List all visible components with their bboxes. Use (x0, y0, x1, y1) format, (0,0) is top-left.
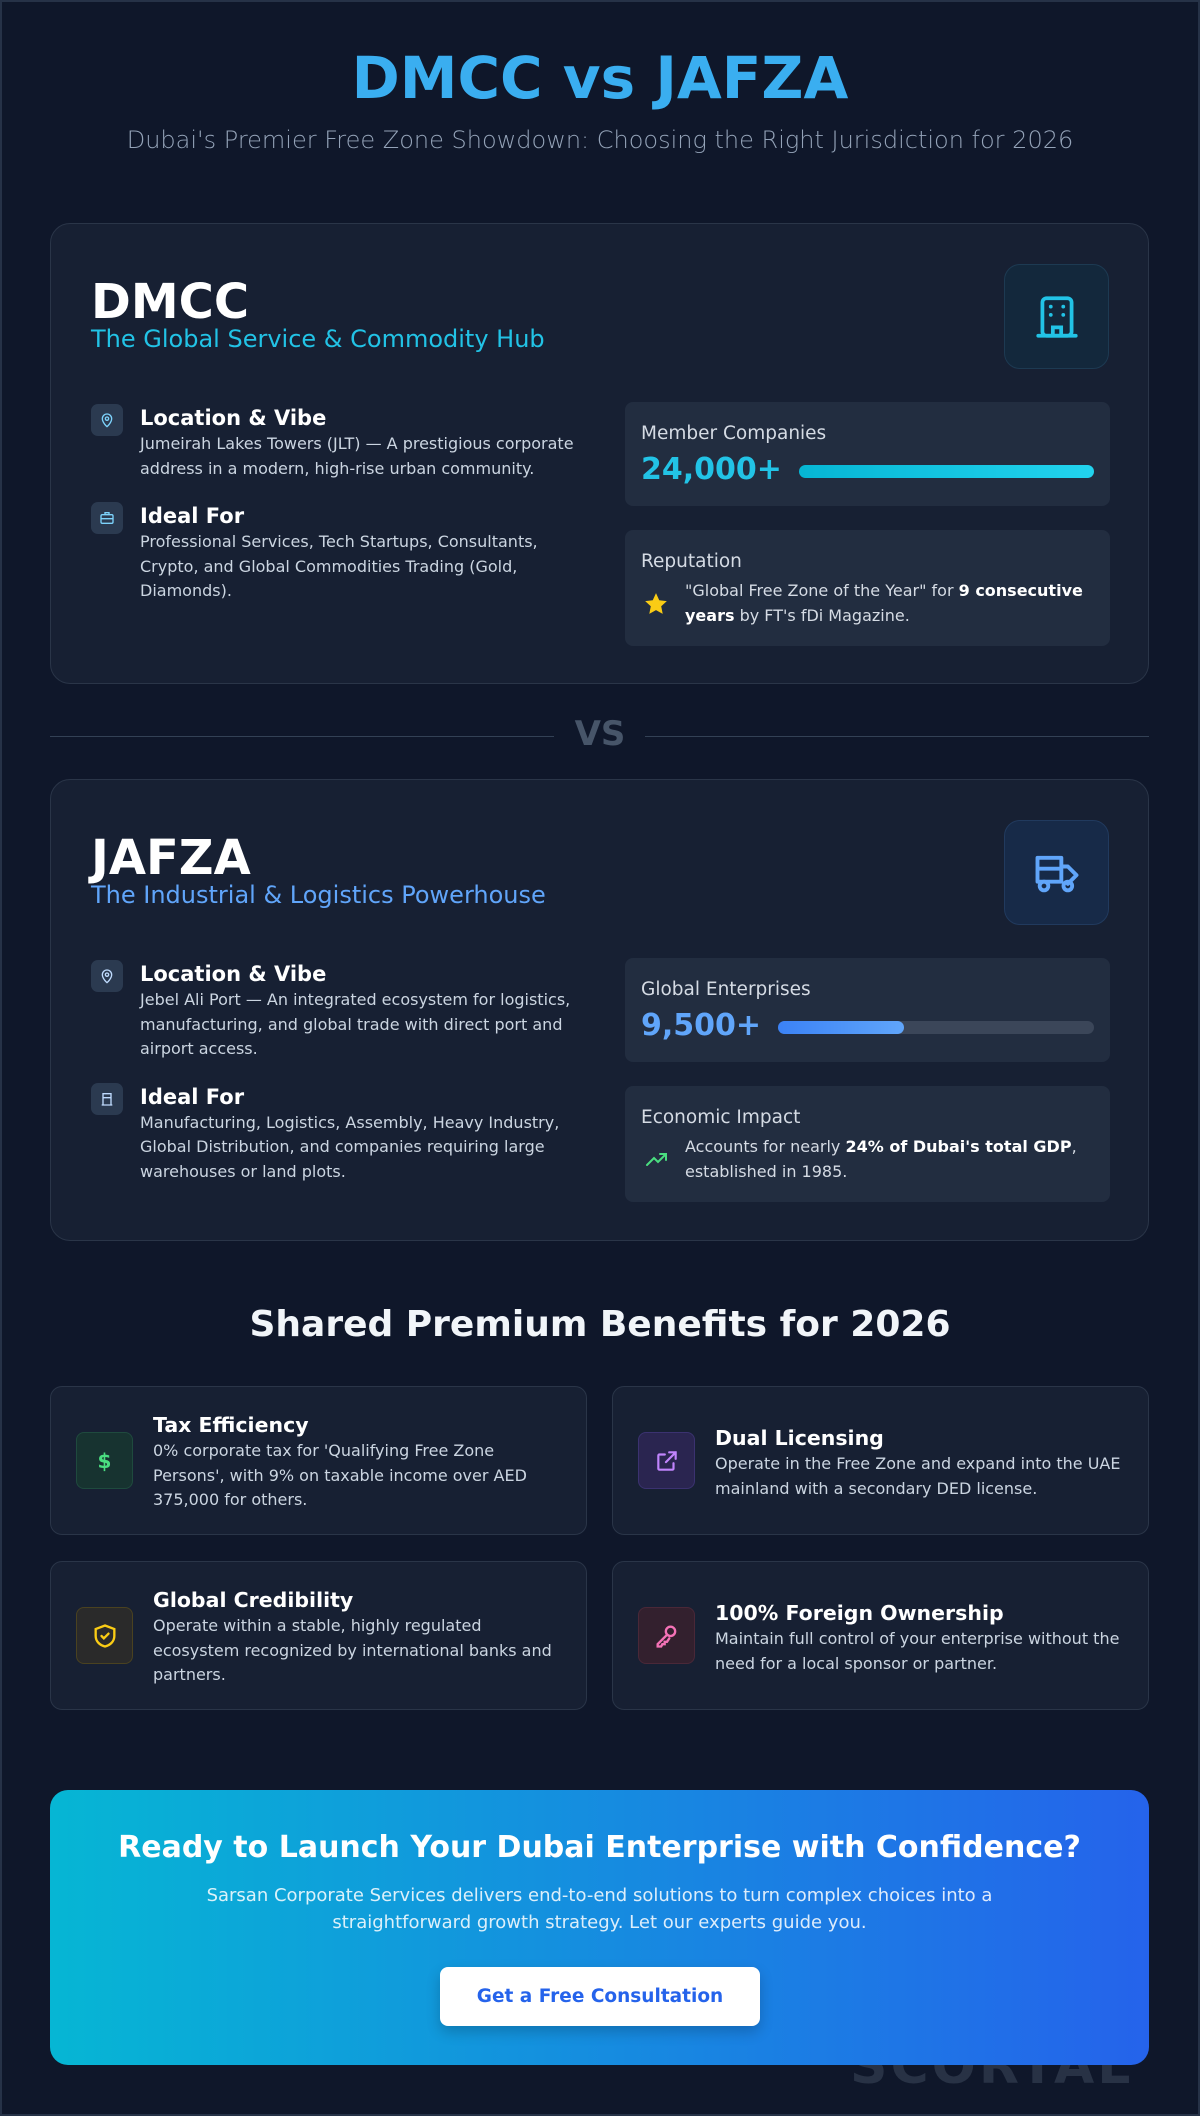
item: location: Jebel Ali Port — An integrated ecosystem for logistics, manufacturing, and global trade with direct port and airport access. (140, 990, 570, 1058)
benefit: tax efficiency: $ (98, 1448, 111, 1472)
benefit: dual licensing: Operate in the Free Zone and expand into the UAE mainland with a secondary DED license. (715, 1454, 1120, 1498)
item: ideal for: Professional Services, Tech Startups, Consultants, Crypto, and Global Commodities Trading (Gold, Diamonds). (140, 532, 538, 600)
item: ideal for: Ideal For (140, 1084, 244, 1108)
text: VS (575, 714, 625, 754)
benefit: tax efficiency (50, 1386, 587, 1535)
tagline: The Industrial & Logistics Powerhouse (91, 881, 546, 909)
stat: economic impact: Economic Impact (641, 1107, 800, 1128)
title: DMCC vs JAFZA (352, 44, 848, 112)
panel: JAFZA (50, 779, 1149, 1241)
tagline: The Global Service & Commodity Hub (91, 325, 545, 353)
heading: DMCC: DMCC (91, 274, 249, 330)
watermark: SCORTAL (850, 2036, 1133, 2096)
heading: shared benefits: Shared Premium Benefits for 2026 (249, 1304, 951, 1345)
icon: truck (1004, 820, 1109, 925)
benefit: foreign ownership: 100% Foreign Ownership (715, 1601, 1004, 1625)
benefit: global credibility: Global Credibility (153, 1588, 353, 1612)
item: ideal for: Manufacturing, Logistics, Assembly, Heavy Industry, Global Distribution, and companies requiring large warehouses or land plots. (140, 1112, 559, 1180)
benefit: tax efficiency: Tax Efficiency (153, 1413, 309, 1437)
item: ideal for (91, 502, 538, 600)
item: location (91, 960, 570, 1058)
item: location: Location & Vibe (140, 962, 326, 986)
benefit: tax efficiency: 0% corporate tax for 'Qualifying Free Zone Persons', with 9% on taxable income over AED 375,000 for others. (153, 1441, 527, 1509)
icon: building (1004, 264, 1109, 369)
stat: member companies: 24,000+ (641, 452, 782, 487)
heading: JAFZA: JAFZA (91, 830, 251, 886)
benefit: global credibility (50, 1561, 587, 1710)
stat: economic impact (625, 1086, 1110, 1202)
benefit: foreign ownership: Maintain full control of your enterprise without the need for a local sponsor or partner. (715, 1629, 1119, 1672)
left column (91, 404, 574, 600)
benefit: dual licensing (612, 1386, 1149, 1535)
benefit: dual licensing: Dual Licensing (715, 1426, 884, 1450)
stat: global enterprises: 9,500+ (641, 1008, 761, 1043)
stat: global enterprises (625, 958, 1110, 1062)
stat: member companies: Member Companies (641, 423, 826, 444)
item: ideal for: Ideal For (140, 504, 244, 528)
CTA text: Sarsan Corporate Services delivers end-to-end solutions to turn complex choices into a straightforward growth strategy. Let our experts guide you. (207, 1885, 992, 1933)
button: Get a Free Consultation (477, 1986, 723, 2007)
subtitle: Dubai's Premier Free Zone Showdown: Choosing the Right Jurisdiction for 2026 (127, 126, 1073, 154)
item: location: Jumeirah Lakes Towers (JLT) — A prestigious corporate address in a modern, high-rise urban community. (140, 434, 574, 478)
left column (91, 960, 570, 1180)
stat: member companies (625, 402, 1110, 506)
item: location (91, 404, 574, 478)
button (440, 1967, 760, 2026)
stat: reputation: "Global Free Zone of the Year" for 9 consecutive years by FT's fDi Magazine. (685, 581, 1083, 624)
stat: global enterprises: Global Enterprises (641, 979, 811, 1000)
CTA heading: Ready to Launch Your Dubai Enterprise with Confidence? (118, 1830, 1081, 1865)
item: location: Location & Vibe (140, 406, 326, 430)
benefit: foreign ownership (612, 1561, 1149, 1710)
benefit: global credibility: Operate within a stable, highly regulated ecosystem recognized by international banks and partners. (153, 1616, 552, 1684)
stat: reputation (625, 530, 1110, 646)
stat: reputation: Reputation (641, 551, 742, 572)
panel: DMCC (50, 223, 1149, 684)
item: ideal for (91, 1083, 559, 1180)
CTA panel (50, 1790, 1149, 2065)
stat: economic impact: Accounts for nearly 24% of Dubai's total GDP, established in 1985. (685, 1137, 1077, 1180)
